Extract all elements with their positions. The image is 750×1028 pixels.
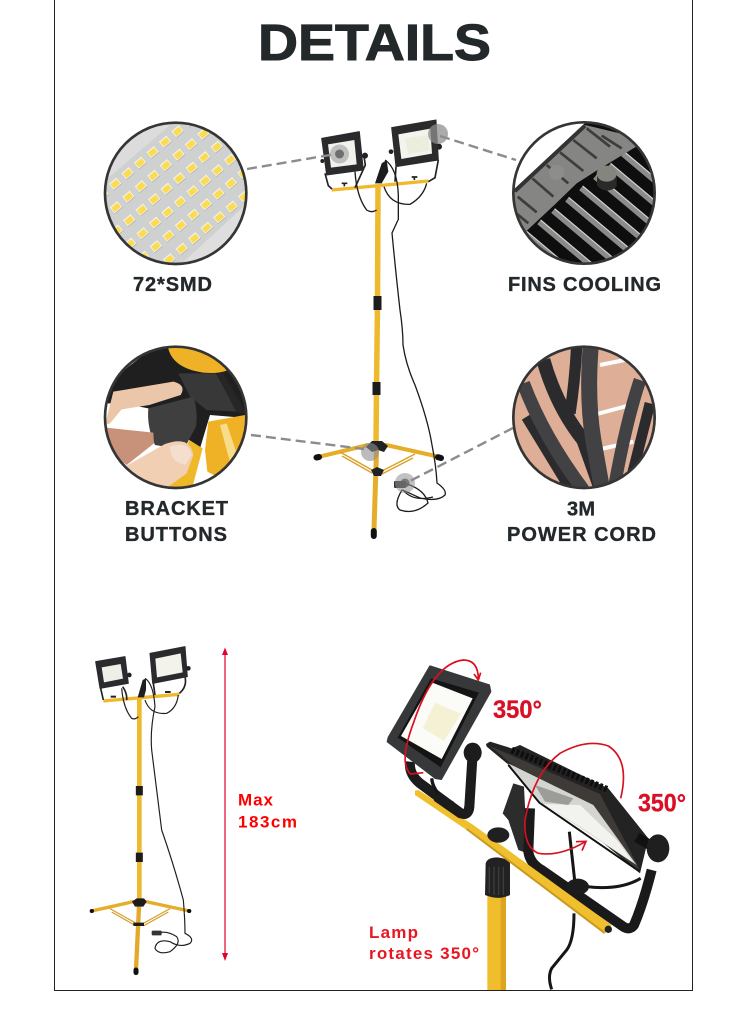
small bracket knob xyxy=(566,879,589,895)
callout spots and dashed leader lines xyxy=(247,124,516,493)
panel: bracket buttons close-up xyxy=(103,345,250,492)
bracket xyxy=(528,808,652,928)
title: DETAILS xyxy=(258,14,491,71)
pole xyxy=(487,895,506,990)
pole collar xyxy=(485,857,510,898)
right lamp knob xyxy=(647,834,669,862)
right lamp xyxy=(150,647,191,695)
left bracket foot over bar xyxy=(437,797,469,814)
panel: 72*SMD close-up xyxy=(104,121,248,266)
label: 3M power cord: POWER CORD xyxy=(507,524,656,546)
red rotation arc right xyxy=(525,743,623,854)
head cords xyxy=(355,160,427,220)
label: 72*SMD: 72*SMD xyxy=(133,274,212,296)
product photo: full height tripod xyxy=(92,647,192,973)
tripod hub xyxy=(366,441,388,476)
label: 3M power cord: 3M xyxy=(567,498,595,520)
tripod hub xyxy=(132,898,147,926)
cords xyxy=(569,832,641,888)
left lamp knob xyxy=(464,743,482,763)
tripod head and lamps xyxy=(320,120,442,220)
left lamp head xyxy=(387,666,491,779)
tripod frame xyxy=(92,694,189,973)
switch box xyxy=(138,678,146,697)
height label: 183cm xyxy=(238,812,297,832)
product photo: tripod work light with two lamps xyxy=(316,120,445,536)
power cord xyxy=(392,220,445,511)
rotation label right: 350° xyxy=(638,790,686,818)
red rotation arc left xyxy=(405,660,481,774)
right lamp head xyxy=(392,120,438,167)
panel: fins cooling close-up xyxy=(512,121,656,265)
height dimension arrow xyxy=(222,648,228,961)
right lamp assembly xyxy=(415,742,669,934)
left bracket xyxy=(410,753,473,814)
hub behind bar xyxy=(503,783,527,853)
caption: lamp rotates 350 degrees xyxy=(369,923,479,963)
product photo: lamps rotating close-up xyxy=(387,660,669,990)
label: bracket buttons: BRACKET xyxy=(125,498,228,520)
caption: lamp rotates 350 degrees: Lamp xyxy=(369,923,418,942)
left lamp head xyxy=(322,132,363,175)
height label xyxy=(238,790,297,832)
label: bracket buttons: BUTTONS xyxy=(125,524,227,546)
panel: power cord close-up xyxy=(510,343,660,493)
height label: Max xyxy=(238,790,274,810)
switch box xyxy=(375,160,388,183)
bracket base cord xyxy=(432,778,453,803)
crossbar xyxy=(332,181,428,190)
plug xyxy=(152,931,162,935)
pole, collar and left lamp xyxy=(387,666,574,990)
lower cord xyxy=(549,913,574,989)
plug xyxy=(394,481,406,488)
cords xyxy=(122,678,192,953)
label: 3M power cord xyxy=(507,498,656,546)
center bar knob xyxy=(487,827,509,843)
right lamp body xyxy=(486,742,648,873)
label: bracket buttons xyxy=(125,498,228,546)
tripod legs and pole xyxy=(316,186,441,536)
label: fins cooling: FINS COOLING xyxy=(508,274,661,296)
rotation label left: 350° xyxy=(493,696,542,724)
brackets and knobs xyxy=(325,157,438,189)
left lamp xyxy=(96,657,132,700)
caption: lamp rotates 350 degrees: rotates 350° xyxy=(369,944,479,963)
crossbar xyxy=(415,790,612,934)
